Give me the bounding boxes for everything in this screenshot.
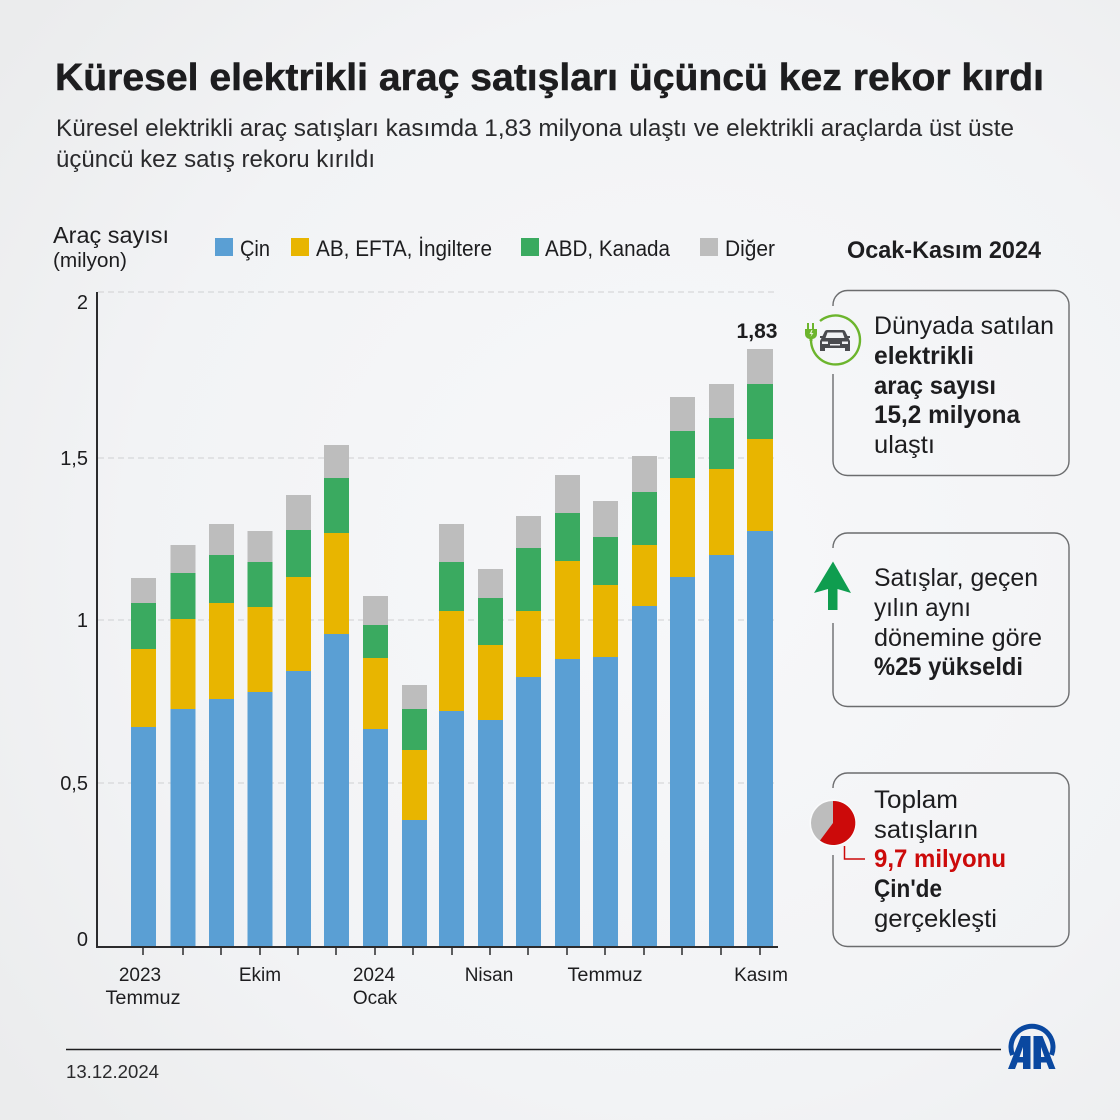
logo: AA [1008,1026,1056,1069]
x axis labels: Temmuz [568,965,642,986]
panel border [833,773,1069,946]
footer rule [66,1048,1001,1050]
bars: Çin [131,531,773,946]
icon: electric car [805,315,860,364]
bars: AB, EFTA, İngiltere [131,439,773,820]
icon: pie chart [810,800,865,859]
panel text: 15,2 milyona [874,401,1021,429]
panel: world sales [805,290,1069,476]
x axis labels: 2023 [119,965,161,986]
grid lines [98,292,778,783]
legend: ABD, Kanada [545,236,671,261]
panel text: Satışlar, geçen [874,564,1038,592]
y axis title: Araç sayısı [53,222,169,248]
panel text [874,312,1054,459]
bars: ABD, Kanada [131,384,773,750]
panel text: yılın aynı [874,594,971,622]
panel text: 9,7 milyonu [874,845,1006,873]
subtitle [56,115,1014,173]
panel text: %25 yükseldi [874,653,1023,681]
title: Küresel elektrikli araç satışları üçüncü kez rekor kırdı [55,57,1044,99]
panel text: araç sayısı [874,372,996,400]
panel text: Çin'de [874,875,942,903]
panel text: Toplam [874,786,958,814]
legend: Diğer [725,236,775,261]
period heading: Ocak-Kasım 2024 [847,237,1042,264]
x axis labels: Nisan [465,965,513,986]
legend: Çin [240,236,270,261]
stacked bar chart [60,292,788,1009]
panel: China share [810,773,1069,946]
panel border [833,290,1069,476]
subtitle: Küresel elektrikli araç satışları kasımda 1,83 milyona ulaştı ve elektrikli araçlarda üst üste [56,115,1014,142]
y axis title: (milyon) [53,250,127,272]
panel text: gerçekleşti [874,905,997,933]
bars: Diğer [131,349,773,709]
panel text: dönemine göre [874,624,1042,652]
legend: AB, EFTA, İngiltere [316,236,492,261]
panel text: ulaştı [874,431,935,459]
x axis labels: Temmuz [106,988,180,1009]
subtitle: üçüncü kez satış rekoru kırıldı [56,146,375,173]
panel: growth [814,533,1069,706]
panel text: elektrikli [874,342,974,370]
panel border [833,533,1069,706]
x axis labels: Kasım [734,965,788,986]
panel text: satışların [874,816,978,844]
axes [97,292,778,955]
y axis labels: 0 [77,929,88,951]
panel text [874,564,1042,681]
y axis labels: 1 [77,610,88,632]
x axis labels: Ekim [239,965,281,986]
x axis labels: Ocak [353,988,398,1009]
icon: up arrow [814,562,851,610]
value label 1,83: 1,83 [736,320,778,343]
date: 13.12.2024 [66,1062,159,1082]
y axis labels: 0,5 [60,773,88,795]
y axis labels [60,292,88,951]
y axis labels: 1,5 [60,448,88,470]
panel text [874,786,1006,933]
panel text: Dünyada satılan [874,312,1054,340]
y axis labels: 2 [77,292,88,314]
legend [215,236,775,261]
y axis title [53,222,169,272]
x axis labels: 2024 [353,965,396,986]
x axis labels [106,965,788,1009]
